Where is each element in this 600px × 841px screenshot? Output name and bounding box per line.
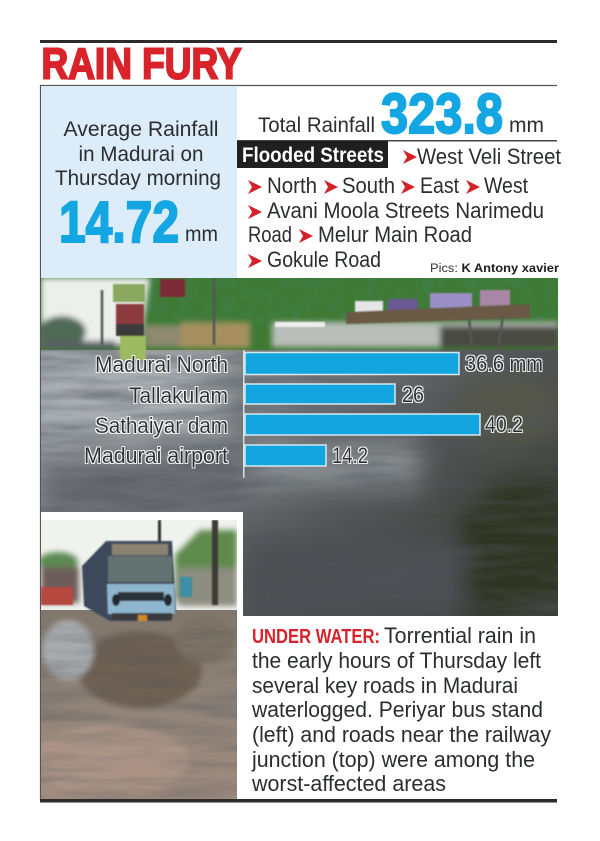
street list: Avani Moola Streets Narimedu [267,198,544,223]
panel: total rainfall: 323.8 [381,82,503,146]
panel: average rainfall: in Madurai on [78,142,204,166]
bar row: Tallakulam: 26 [402,382,424,407]
bar row: Sathaiyar dam: Sathaiyar dam [95,413,228,438]
street list: South [342,173,395,198]
panel: average rainfall: mm [185,222,218,246]
bar row: Sathaiyar dam: 40.2 [485,412,523,437]
bar row: Madurai airport: 14.2 [332,443,368,468]
divider [237,140,557,142]
panel: average rainfall: 14.72 [59,190,179,255]
bar row: Madurai North: 36.6 mm [465,351,543,376]
panel: total rainfall: mm [509,113,544,137]
street list: North [267,173,317,198]
street list: Melur Main Road [318,222,472,247]
bar row: Madurai North: Madurai North [95,352,228,377]
bar chart [84,350,543,478]
bar row: Madurai airport [84,443,368,468]
bar row: Tallakulam [129,382,424,408]
inset white panel [41,512,243,800]
caption: junction (top) were among the [251,747,535,772]
street list: East [420,173,459,198]
bar row: Sathaiyar dam [95,412,523,438]
photo: flooded road [30,278,582,620]
street list: Road [248,222,292,247]
caption: the early hours of Thursday left [252,648,541,673]
panel: total rainfall: Total Rainfall [258,113,375,137]
bar row: Madurai North [95,351,543,377]
panel: average rainfall [41,86,237,278]
panel: average rainfall: Average Rainfall [64,117,218,141]
title: RAIN FURY [42,40,242,88]
bar row: Madurai airport: Madurai airport [84,443,228,468]
bar row: Tallakulam: Tallakulam [129,383,228,408]
caption: several key roads in Madurai [252,673,518,698]
caption: Torrential rain in [384,623,536,648]
bottom rule [40,799,557,802]
caption: (left) and roads near the railway [252,722,551,747]
street list [248,144,561,272]
frame rules [40,85,557,800]
panel: flooded streets [237,141,561,272]
street list: West [484,173,528,198]
photo credit: Pics: K Antony xavier [430,263,560,275]
panel: total rainfall [258,82,544,146]
street list: West Veli Street [417,144,561,169]
caption: waterlogged. Periyar bus stand [251,697,543,722]
chart axis [243,350,244,478]
street list: Gokule Road [267,247,381,272]
top rule [40,40,557,43]
photo: bus in flood [30,520,237,799]
flooded streets heading: Flooded Streets [242,144,384,167]
caption [251,623,551,796]
panel: average rainfall: Thursday morning [55,166,221,190]
caption: worst-affected areas [251,771,446,796]
caption: UNDER WATER: [252,626,380,648]
